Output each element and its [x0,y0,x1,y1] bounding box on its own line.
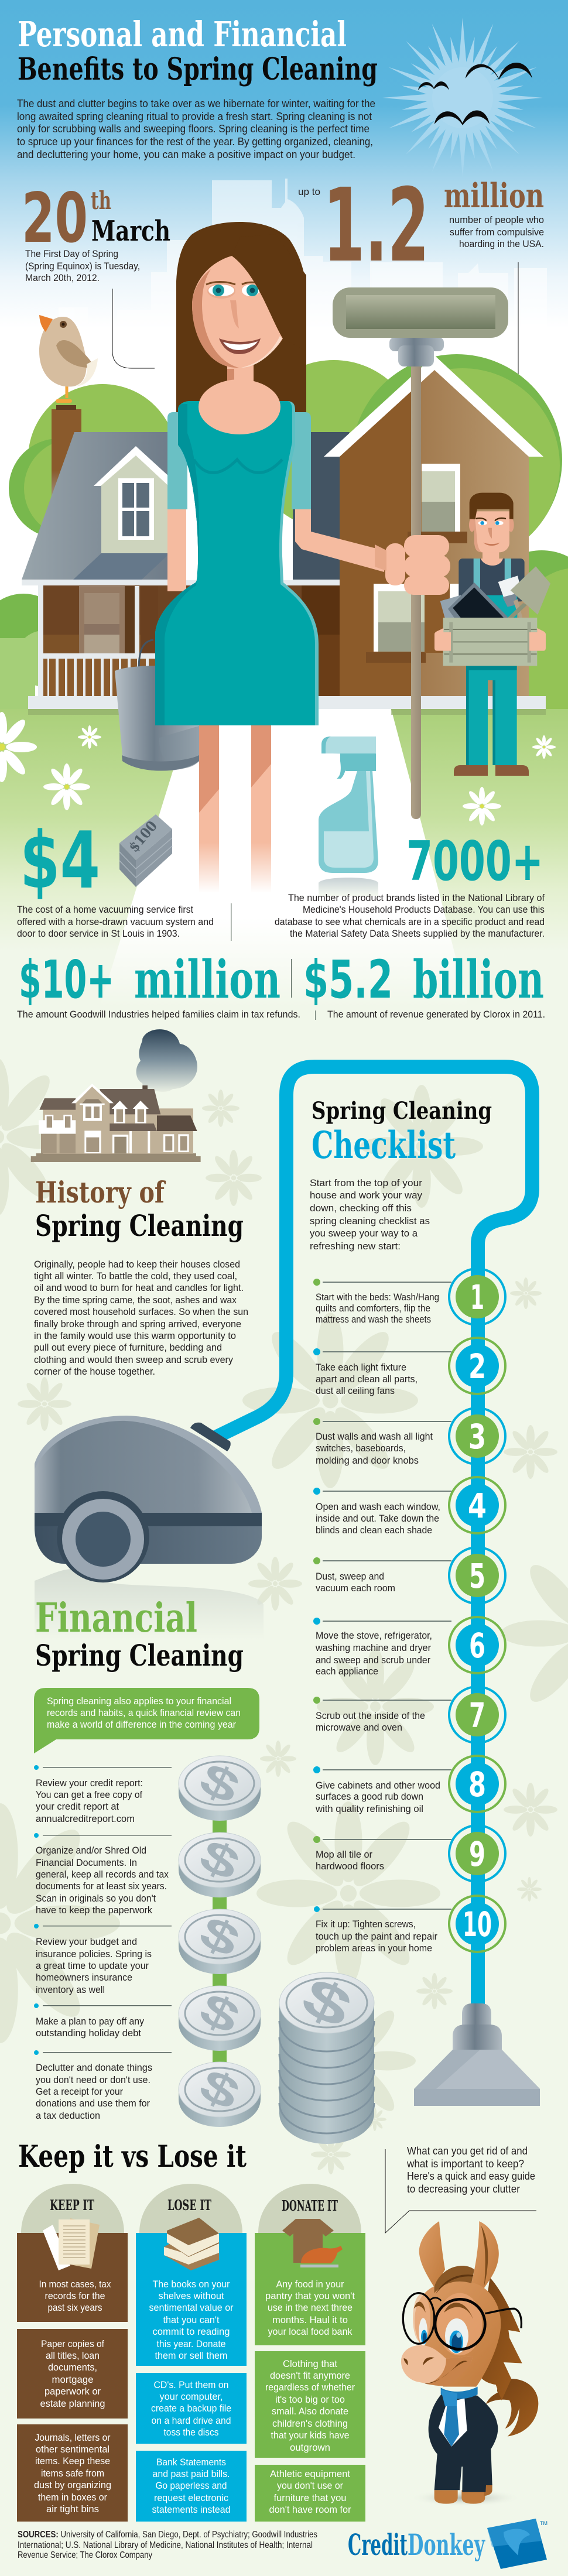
statistic: $4: $4 [20,815,100,906]
financial tip 3 [34,1924,172,1995]
checklist item 6: Move the stove, refrigerator, [316,1630,432,1641]
column: lose it: toss the discs [164,2427,219,2438]
speech line [385,2149,536,2233]
column: donate it [255,2184,365,2522]
checklist item 8 [313,1756,505,1814]
column: keep it: them in boxes or [38,2492,107,2503]
financial tip 3: a great time to update your [36,1960,149,1971]
column: keep it: paperwork or [45,2386,101,2397]
heading: financial: Spring Cleaning [35,1638,244,1673]
column: lose it: them or sell them [155,2350,227,2361]
checklist item 2: dust all ceiling fans [316,1385,395,1396]
checklist item 6: each appliance [316,1666,378,1677]
donkey mascot [401,2221,538,2507]
history text: covered most household surfaces. So when the sun [34,1306,248,1317]
checklist item 8: surfaces a good rub down [316,1791,423,1802]
column: donate it: children's clothing [272,2418,348,2429]
icon: smoke [136,1029,197,1092]
title: Benefits to Spring Cleaning [18,52,378,87]
checklist intro: Start from the top of your [310,1177,422,1188]
title [18,14,378,87]
statistic: $4 [17,815,214,939]
checklist item 7 [313,1687,505,1743]
checklist item 2 [313,1338,505,1396]
column: keep it: Paper copies of [41,2338,104,2349]
checklist item 8: 8 [468,1765,486,1804]
dress [155,379,319,725]
intro text: only for scrubbing walls and sweeping floors. Spring cleaning is the perfect time [17,123,369,135]
checklist item 9: Mop all tile or [316,1849,372,1860]
checklist intro [310,1177,430,1252]
icon: spray bottle [319,737,378,896]
checklist item 10 [314,1896,505,1954]
column: lose it: Bank Statements [156,2457,226,2468]
financial tip 2: Scan in originals so you don't [36,1893,156,1904]
statistic: $5.2 billion: The amount of revenue generated by Clorox in 2011. [327,1009,545,1020]
statistic: $10+ million [17,948,300,1020]
column: lose it: CD's. Put them on [153,2379,228,2390]
heading: financial [35,1595,244,1673]
column: donate it: doesn't fit anymore [270,2370,350,2381]
checklist item 6: and sweep and scrub under [316,1654,430,1666]
coin column [179,1752,261,2127]
icon: old house [31,1084,201,1162]
column: donate it: your local food bank [268,2326,353,2337]
intro text: and decluttering your home, you can make a positive impact on your budget. [17,149,355,160]
icon: sun [382,18,543,178]
donkey speech text: what is important to keep? [406,2158,524,2170]
column: lose it: Go paperless and [156,2480,227,2491]
checklist item 7: Scrub out the inside of the [316,1710,425,1721]
coin 3 [179,1906,261,1974]
sky gradient [0,0,568,328]
chimney [52,405,81,497]
checklist item 6: 6 [469,1626,485,1666]
financial tip 1: Review your credit report: [36,1777,143,1789]
statistic: $10+ million: million [134,948,280,1010]
column: lose it: create a backup file [151,2403,231,2414]
column: keep it: In most cases, tax [39,2279,111,2290]
logo: TM [540,2520,548,2526]
checklist item 4 [313,1477,505,1536]
logo [348,2519,548,2569]
icon: birds [418,63,532,125]
intro text [17,98,375,160]
intro text: long awaited spring cleaning ritual to provide a fresh start. Spring cleaning is not [17,111,372,122]
financial tip 4: Make a plan to pay off any [36,2016,144,2027]
financial tip 5: donations and use them for [36,2098,150,2109]
statistic: 7000+: Medicine's Household Products Database. You can use this [303,904,545,915]
donkey speech text: What can you get rid of and [407,2145,528,2157]
face [192,256,283,368]
donkey speech text: Here's a quick and easy guide [407,2170,535,2182]
statistic: 7000+ [275,830,545,939]
column: lose it [136,2184,247,2522]
checklist item 10: touch up the paint and repair [316,1931,437,1942]
column: donate it: small. Also donate [272,2406,348,2417]
checklist item 5 [313,1547,505,1604]
callout [34,1688,259,1753]
coin 5 [179,2058,261,2127]
woman with broom [155,222,508,893]
dividers [291,959,316,1020]
sources: SOURCES: University of California, San Diego, Dept. of Psychiatry; Goodwill Industries [18,2530,317,2540]
statistic: 20th March [22,178,170,283]
checklist intro: you sweep your way to a [310,1228,418,1239]
history text: corner of the house together. [34,1366,155,1377]
icon: roast turkey [300,2246,343,2267]
bushes [0,354,568,709]
small bird [39,315,98,403]
financial tip 4 [34,2003,172,2039]
financial tip 5 [34,2050,172,2121]
heading: history: Spring Cleaning [35,1208,244,1243]
column: donate it: pantry that you won't [265,2290,355,2301]
neck [227,363,254,416]
checklist item 9 [313,1825,505,1882]
financial tip 2 [34,1833,172,1916]
history text: tight all winter. To battle the cold, they used coal, [34,1270,237,1282]
checklist item 2: 2 [468,1347,486,1386]
heading: checklist [312,1097,492,1167]
history text: clothing and would then sweep and scrub every [34,1354,233,1365]
checklist item 2: apart and clean all parts, [316,1373,418,1385]
coin 1: $ [192,1752,247,1814]
callout: Spring cleaning also applies to your financial [47,1695,231,1707]
icon: papers [43,2218,100,2270]
checklist item 1: quilts and comforters, flip the [316,1303,430,1314]
donkey speech text [406,2145,535,2195]
hose [214,1067,532,2005]
column: donate it: DONATE IT [282,2197,338,2214]
upper window [408,464,467,543]
column: lose it: that you can't [163,2314,220,2325]
history text: oil and wood to burn for heat and candles for light. [34,1282,244,1293]
history text: Originally, people had to keep their houses closed [34,1259,240,1270]
leader lines [112,262,518,480]
checklist item 2: Take each light fixture [316,1362,406,1373]
financial tip 2: documents for at least six years. [36,1880,167,1892]
column: donate it: Any food in your [276,2279,344,2290]
column: keep it: items. Keep these [35,2455,110,2467]
coin 2 [179,1829,261,1897]
statistic: $4: door to door service in St Louis in 1903. [17,928,180,939]
hair [176,222,306,422]
statistic: $5.2 billion [303,948,545,1020]
column: keep it: items safe from [41,2468,104,2479]
statistic: 7000+: database to see what chemicals are in a specific product and read [275,916,545,927]
callout: make a world of difference in the coming year [47,1719,236,1730]
financial tip 3: Review your budget and [36,1936,137,1947]
column: keep it: other sentimental [36,2444,110,2455]
heading: history [35,1175,244,1243]
checklist item 9: hardwood floors [316,1861,384,1872]
column: lose it: this year. Donate [157,2338,226,2349]
checklist item 10: problem areas in your home [316,1943,432,1954]
checklist item 4: Open and wash each window, [316,1501,440,1512]
divider [231,903,232,941]
column: donate it: use in the next three [268,2302,353,2313]
dormer [94,446,170,553]
checklist item 4: blinds and clean each shade [316,1525,432,1536]
column: lose it: statements instead [152,2504,231,2515]
column: keep it: mortgage [52,2374,94,2385]
right arm [295,509,386,572]
column: donate it: Clothing that [283,2358,337,2369]
checklist item 6: washing machine and dryer [315,1642,431,1653]
financial tip 1: annualcreditreport.com [36,1813,135,1824]
checklist item 7: microwave and oven [316,1722,402,1733]
statistic: 1.2 million: up to [298,186,320,197]
checklist intro: refreshing new start: [310,1241,401,1252]
vacuum nozzle [414,2003,540,2106]
right house [28,355,546,715]
column: lose it: sentimental value or [149,2302,234,2313]
statistic: $10+ million: The amount Goodwill Industries helped families claim in tax refunds. [17,1009,300,1020]
sources: Revenue Service; The Clorox Company [18,2550,152,2560]
icon: money stack [119,814,172,887]
statistic: 1.2 million: suffer from compulsive [450,227,544,238]
checklist item 3 [313,1408,505,1466]
statistic: $4: The cost of a home vacuuming service first [17,904,193,915]
financial tip 2: Organize and/or Shred Old [36,1845,146,1856]
column: keep it: KEEP IT [50,2197,94,2214]
coin 3: $ [192,1906,247,1967]
column: keep it: air tight bins [46,2503,99,2515]
checklist item 1: 1 [470,1277,484,1317]
intro text: The dust and clutter begins to take over as we hibernate for winter, waiting for the [17,98,375,109]
financial tip 1: your credit report at [36,1801,119,1812]
statistic: 20th March: March 20th, 2012. [25,272,100,283]
heading: history: History of [35,1175,166,1210]
column: donate it: furniture that you [274,2492,347,2503]
checklist item 5: Dust, sweep and [316,1571,384,1582]
coin 1 [179,1752,261,1821]
column: donate it: that your kids have [271,2430,349,2441]
checklist item 10: 10 [463,1904,492,1944]
financial tip 5: a tax deduction [36,2110,100,2121]
vacuum cleaner [35,1416,264,1639]
grass [0,705,568,951]
history text: in the family would use this warm opportunity to [34,1330,236,1341]
column: donate it: Athletic equipment [270,2468,350,2479]
coin 4 [179,1982,261,2051]
white path [100,709,468,1007]
financial tip 3: insurance policies. Spring is [36,1948,152,1960]
checklist item 3: switches, baseboards, [316,1443,406,1454]
daisies [0,712,556,825]
checklist intro: house and work your way [310,1190,422,1201]
roof [22,432,176,580]
column: lose it: The books on your [152,2279,230,2290]
column: donate it: regardless of whether [265,2382,355,2393]
column: lose it: on a hard drive and [151,2415,231,2426]
column: lose it: your computer, [159,2391,223,2402]
bucket [115,640,202,770]
icon: money stack: $100 [125,817,160,855]
statistic: 20th March: 20 [22,178,88,258]
sources: International; U.S. National Library of Medicine, National Institutes of Health; Internal [18,2540,313,2550]
column: lose it: and past paid bills. [152,2468,230,2479]
column: donate it: you don't use or [277,2480,343,2491]
financial tip 5: you don't need or don't use. [36,2074,150,2085]
column: lose it: shelves without [158,2290,224,2301]
checklist item 6 [313,1617,505,1677]
statistic: 20th March: The First Day of Spring [25,248,118,259]
sleeves [167,412,311,509]
checklist item 3: molding and door knobs [316,1455,419,1466]
column: keep it: Journals, letters or [35,2432,111,2443]
financial tip 3: homeowners insurance [36,1972,132,1983]
financial tip 2: Financial Documents. In [36,1857,137,1868]
checklist item 1: Start with the beds: Wash/Hang [316,1292,439,1303]
statistic: $10+ million: $10+ [19,949,114,1010]
financial tip 5: Declutter and donate things [36,2062,152,2073]
column: lose it: request electronic [154,2492,228,2503]
statistic: $5.2 billion: $5.2 [303,949,393,1010]
column: keep it [17,2184,128,2522]
column: donate it: outgrown [290,2442,330,2453]
checklist item 3: 3 [468,1417,486,1457]
financial tip 5: Get a receipt for your [36,2086,123,2097]
financial tip 1 [34,1765,172,1824]
coin 5: $ [192,2058,247,2120]
heading: keep vs lose: Keep it vs Lose it [18,2139,247,2174]
logo: Credit [348,2527,408,2562]
coin 4: $ [192,1982,247,2044]
checklist item 7: 7 [469,1695,485,1735]
legs [199,725,271,893]
left house [22,405,350,696]
checklist item 4: inside and out. Take down the [316,1513,439,1524]
callout: records and habits, a quick financial review can [47,1707,241,1718]
checklist item 5: vacuum each room [316,1582,395,1594]
history text [34,1259,248,1377]
man's shoes [454,765,529,776]
column: lose it: commit to reading [152,2326,230,2337]
donkey speech text: to decreasing your clutter [407,2183,520,2195]
checklist item 3: Dust walls and wash all light [316,1431,433,1442]
statistic: 7000+: The number of product brands listed in the National Library of [288,892,545,903]
column: keep it: documents, [48,2362,97,2373]
checklist intro: spring cleaning checklist as [310,1215,430,1227]
checklist item 5: 5 [469,1556,485,1596]
column: keep it: all titles, loan [46,2350,100,2361]
financial tip 2: general, keep all records and tax [36,1869,169,1880]
checklist item 1: mattress and wash the sheets [316,1314,431,1325]
checklist item 1 [313,1269,505,1325]
city skyline [59,179,547,410]
hair fringe [232,234,306,351]
icon: t-shirt [282,2219,334,2263]
broom [333,287,508,819]
intro text: to spruce up your finances for the rest of the year. By getting organized, cleaning, [17,136,373,148]
statistic: $4: offered with a horse-drawn vacuum system and [17,916,214,927]
title: Personal and Financial [18,14,347,54]
column: donate it: it's too big or too [275,2394,345,2405]
column: keep it: records for the [45,2290,105,2301]
sky [0,0,568,714]
financial tip 1: You can get a free copy of [36,1789,142,1800]
left arm [167,509,186,591]
statistic: 20th March: (Spring Equinox) is Tuesday, [25,261,140,272]
financial tip 3: inventory as well [36,1984,105,1995]
lower window [366,584,460,663]
checklist item 10: Fix it up: Tighten screws, [316,1919,416,1930]
statistic: 7000+: the Material Safety Data Sheets supplied by the manufacturer. [290,928,545,939]
history text: By the time spring came, the soot, ashes and wax [34,1294,237,1306]
column: donate it: months. Haul it to [272,2314,348,2325]
history text: pull out every piece of furniture, bedding and [34,1342,222,1353]
statistic: 1.2 million: number of people who [449,214,544,225]
icon: books [164,2218,219,2270]
column: keep it: estate planning [40,2398,105,2409]
checklist intro: down, checking off this [310,1203,412,1214]
column: lose it: LOSE IT [167,2197,211,2214]
checklist item 8: Give cabinets and other wood [316,1780,440,1791]
history text: finally broke through and spring arrived, everyone [34,1318,241,1330]
statistic: 1.2 million: hoarding in the USA. [459,238,544,249]
financial tip 4: outstanding holiday debt [36,2027,141,2039]
statistic: 20th March: March [91,215,170,248]
porch [22,580,340,696]
checklist item 4: 4 [468,1486,487,1526]
checklist item 8: with quality refinishing oil [315,1803,423,1814]
coin stack [279,1965,374,2144]
fist [375,535,450,595]
sources [18,2530,317,2560]
statistic: 1.2 million: 1.2 [323,166,429,285]
logo: Donkey [408,2527,485,2562]
heading: financial: Financial [35,1595,197,1642]
decorative flowers [0,1058,568,2174]
statistic: 20th March: th [91,186,111,215]
heading: checklist: Checklist [312,1123,456,1167]
coin 2: $ [192,1829,247,1890]
checklist item 9: 9 [469,1834,485,1874]
heading: checklist: Spring Cleaning [312,1097,492,1125]
column: keep it: past six years [48,2302,102,2313]
column: donate it: don't have room for [269,2504,351,2515]
column: keep it: dust by organizing [34,2479,111,2491]
man with crate [434,493,550,765]
coin stack: $ [293,1965,361,2040]
financial tip 2: have to keep the paperwork [36,1904,152,1916]
